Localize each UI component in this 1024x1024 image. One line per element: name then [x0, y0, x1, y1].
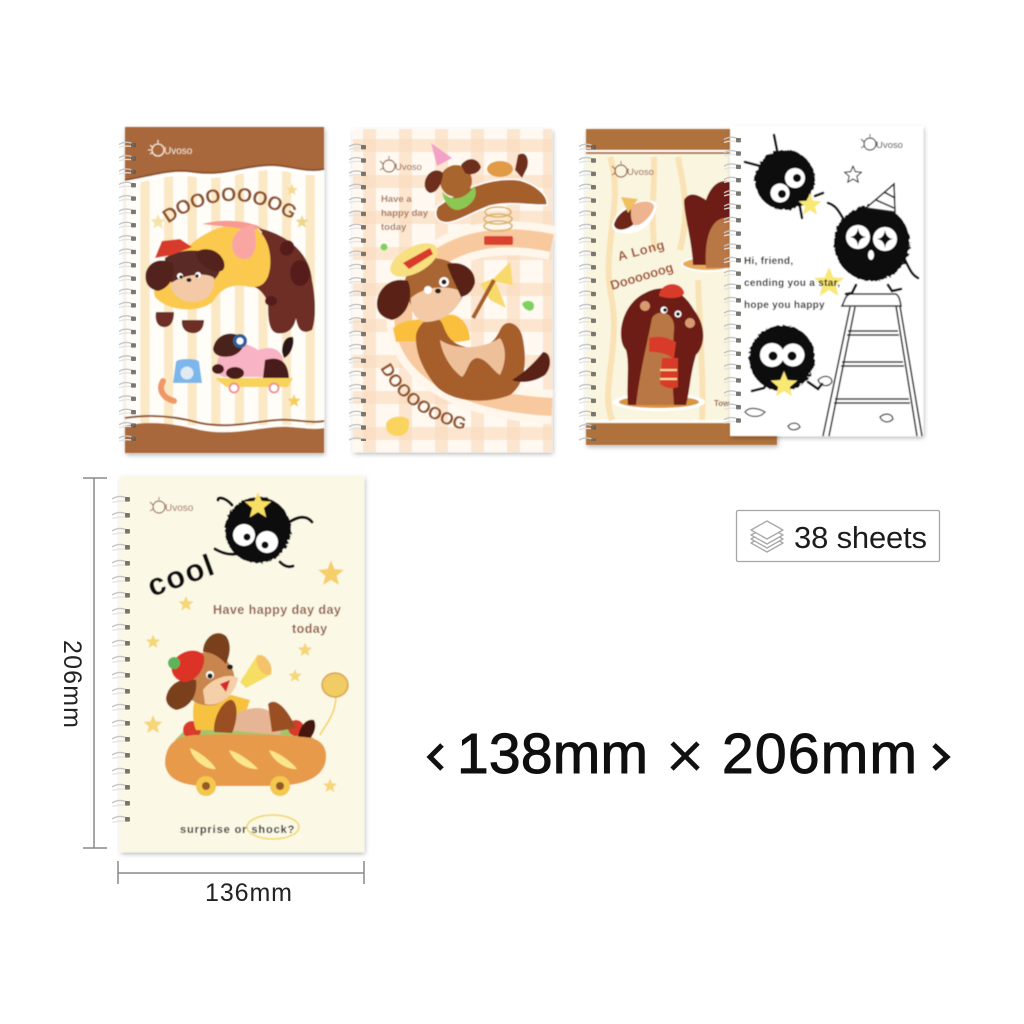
heading: A Long: A Long — [616, 237, 667, 264]
text: Have happy day day today: Have happy day day — [213, 603, 341, 617]
heading: DOOOOOOG arc bottom: DOOOOOOG — [380, 362, 466, 430]
illustration: big dog arching — [146, 221, 315, 333]
spiral binding: notebook 2 — [348, 141, 368, 441]
logo: notebook 5 — [150, 497, 194, 514]
notebook 2: peach plaid cover — [351, 128, 556, 457]
illustration: soot sprite with star — [215, 492, 312, 567]
logo: notebook 2: Uvoso — [395, 162, 422, 173]
dimension: vertical 206mm — [58, 478, 107, 848]
text: Hi, friend message — [744, 256, 844, 311]
logo: notebook 1: Uvoso — [164, 146, 193, 157]
arrow: right chevron — [934, 745, 947, 769]
size callout: 138mm x 206mm: 138mm — [457, 722, 648, 786]
text: surprise or shock: surprise or shock? — [180, 824, 295, 836]
dimension: horizontal 136mm: 136mm — [205, 879, 292, 907]
icon: stacked sheets — [751, 521, 783, 552]
logo: notebook 3 — [612, 161, 654, 178]
notebook 5: cream cool cover with dimensions — [120, 476, 364, 852]
orange rainbow ribbon — [403, 238, 552, 407]
illustration: small dog on skateboard with phone — [150, 184, 309, 407]
heading: cool: cool — [142, 547, 220, 604]
dimension: horizontal 136mm — [118, 861, 364, 907]
text: Have happy day day today: today — [292, 622, 328, 636]
heading: DOOOOOOG arc: DOOOOOOOG — [161, 186, 296, 224]
illustration: tall dog in hole with scarf — [613, 284, 705, 411]
illustration: dog on bread skateboard with megaphone — [165, 633, 348, 796]
callout: 38 sheets — [736, 510, 940, 562]
logo: notebook 1 — [148, 140, 193, 157]
notebook 4: white soot sprite cover — [730, 126, 923, 436]
logo: notebook 3: Uvoso — [627, 167, 654, 178]
illustration: small dog head with cone hat — [612, 197, 656, 233]
illustration: dog on spring — [425, 143, 547, 245]
text: surprise or shock — [180, 815, 299, 839]
illustration: soot sprite top left — [745, 135, 823, 218]
text: Have a happy day today: Have a — [381, 194, 412, 205]
illustration: soot sprite with party hat on ladder — [828, 184, 918, 294]
notebook 1: brown striped DOOOOOOG cover — [123, 126, 328, 458]
spiral binding: notebook 1 — [118, 139, 138, 446]
illustration: dog with straw hat and pinwheel — [377, 236, 550, 401]
text: multiply sign: × — [666, 718, 704, 792]
spiral binding: notebook 5 — [112, 493, 134, 831]
icons: small clouds and stars — [745, 166, 893, 430]
size callout: 138mm x 206mm — [430, 718, 947, 792]
illustration: second dog in hole — [682, 181, 734, 271]
logo: notebook 5: Uvoso — [165, 503, 194, 514]
text: Hi, friend message: hope you happy — [744, 300, 825, 311]
notebook 3: long dog cover (behind) — [586, 129, 777, 445]
size callout: 138mm x 206mm: 206mm — [722, 722, 917, 786]
text: Town: Tow — [714, 399, 730, 408]
illustration: soot sprite holding star — [749, 325, 822, 396]
text: Hi, friend message: cending you a star, — [744, 278, 840, 289]
dimension: vertical 206mm: 206mm — [58, 640, 86, 728]
spiral binding: notebook 4 — [723, 134, 742, 428]
text: Have a happy day today: today — [381, 222, 407, 233]
icon: biscuit — [386, 417, 409, 436]
heading: Doooooog: Doooooog — [608, 260, 675, 293]
illustration: ladder — [823, 294, 922, 436]
spiral binding: notebook 3 — [578, 141, 598, 441]
arrow: left chevron — [430, 745, 442, 769]
logo: notebook 2 — [380, 156, 422, 173]
wavy stripes — [608, 157, 703, 420]
logo: notebook 4: Uvoso — [876, 140, 903, 151]
logo: notebook 4 — [861, 134, 903, 151]
icons: scattered stars — [144, 560, 344, 792]
text: Have a happy day today: happy day — [381, 208, 429, 219]
callout: 38 sheets: 38 sheets — [794, 520, 927, 555]
text: Hi, friend message: Hi, friend, — [744, 256, 793, 267]
